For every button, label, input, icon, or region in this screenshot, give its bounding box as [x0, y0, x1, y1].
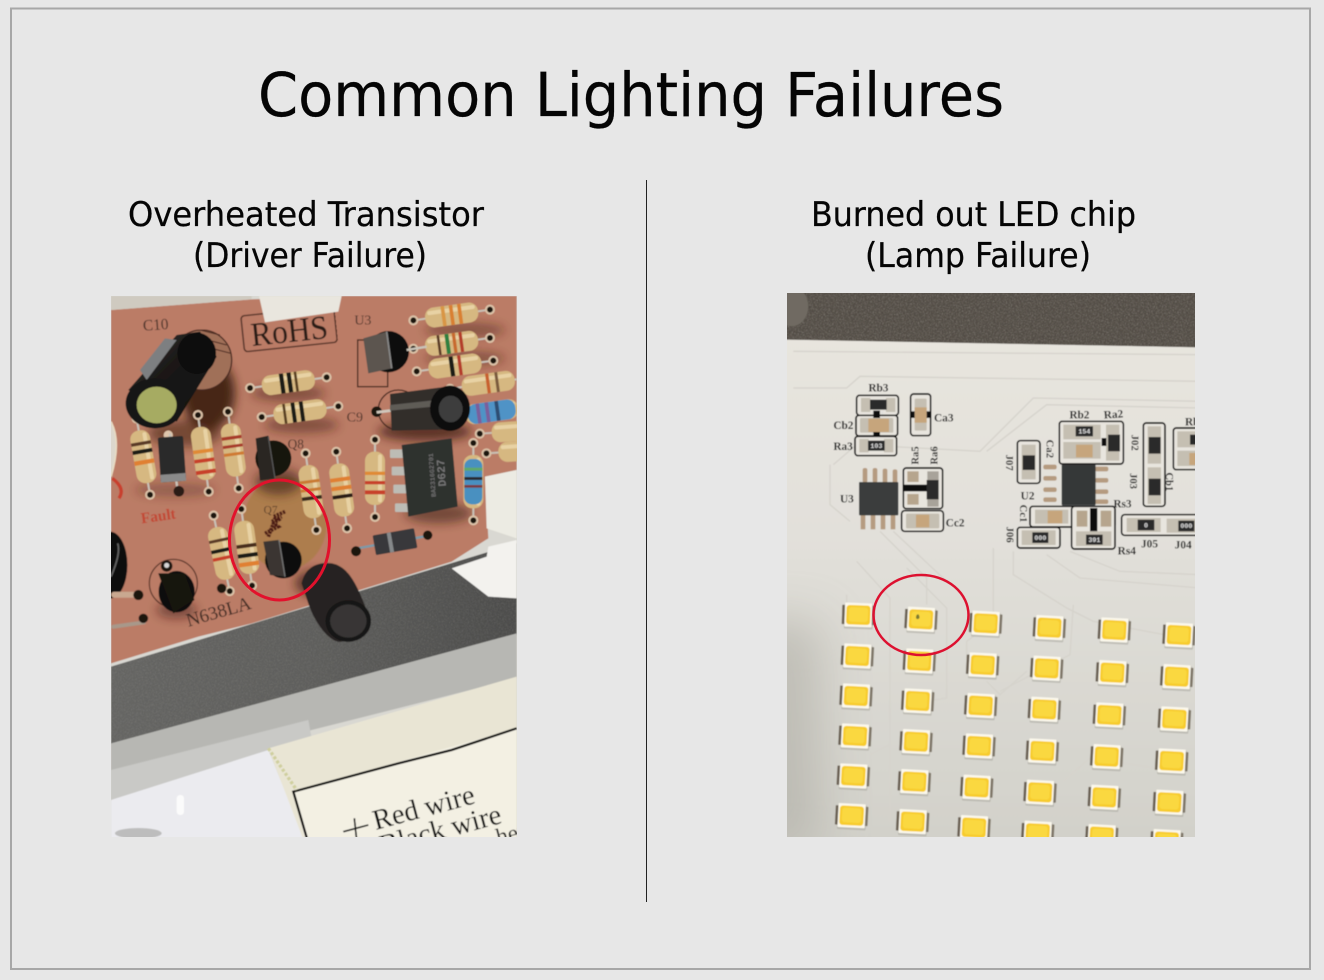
U3 driver circuit group — [833, 382, 965, 531]
SMD Rb3: 154 — [872, 410, 884, 418]
U2 silkscreen labels: J03 — [1127, 473, 1138, 489]
U2 driver circuit group — [1003, 408, 1202, 558]
shadows — [135, 323, 505, 618]
resistors — [408, 302, 496, 328]
U2 silkscreen labels: Cb1 — [1163, 472, 1174, 491]
SMD Cc1, Rs3, Rs4: 391 — [1088, 536, 1100, 544]
silkscreen labels: Q8 — [288, 437, 304, 452]
U2 silkscreen labels: Ca2 — [1044, 440, 1055, 458]
red circle highlight — [874, 575, 968, 655]
op-amp IC: D627 — [436, 459, 450, 487]
U3 silkscreen labels: Cc2 — [946, 518, 965, 530]
U3 silkscreen labels: Ra3 — [833, 441, 853, 453]
left column heading: (Driver Failure) — [193, 236, 427, 276]
U3 silkscreen labels: Ca3 — [934, 412, 954, 424]
silkscreen labels: N638LA — [184, 593, 254, 631]
capacitor C10 — [126, 330, 232, 428]
U2 silkscreen labels — [1003, 408, 1199, 558]
light grey housing band — [111, 633, 517, 770]
op-amp IC: BA2316G2701 — [427, 453, 438, 497]
SMD Rb2 and Ra2 — [1059, 421, 1123, 464]
warning label: Red wire — [369, 779, 478, 837]
SMD Cc2 — [902, 511, 943, 531]
U3 silkscreen labels: Cb2 — [833, 420, 854, 432]
warning label: Black wire — [376, 799, 505, 862]
U2 silkscreen labels: Rb2 — [1069, 410, 1090, 422]
PCB — [111, 296, 517, 663]
scorched area around transistor — [243, 477, 327, 570]
white connectors — [485, 470, 517, 538]
U2 silkscreen labels: J07 — [1003, 455, 1014, 471]
diodes — [157, 429, 187, 498]
right column heading — [811, 195, 1136, 276]
transistor lower left — [149, 559, 226, 613]
U3 silkscreen labels: Ra5 — [910, 446, 921, 465]
SMD J05 and J04: 000 — [1180, 522, 1192, 530]
SMD Cb2 — [856, 411, 898, 439]
transistor U3 — [358, 331, 427, 387]
tall black inductor — [302, 563, 371, 642]
metal strip — [111, 543, 517, 745]
right column heading: (Lamp Failure) — [865, 236, 1091, 276]
photo: burned out LED chip on lamp board — [787, 293, 1195, 837]
column divider — [646, 180, 648, 902]
op-amp IC — [390, 438, 458, 517]
U2 silkscreen labels: J04 — [1175, 540, 1192, 552]
SMD Ra5 and Ra6 — [903, 468, 943, 509]
U3 silkscreen labels — [833, 382, 965, 530]
U2 silkscreen labels: U2 — [1021, 490, 1035, 502]
U2 silkscreen labels: J02 — [1129, 435, 1140, 451]
SMD Rb3 — [857, 395, 898, 418]
SMD J02 and J03 — [1143, 423, 1165, 506]
left column heading — [128, 195, 484, 276]
SMD Ra3 — [855, 436, 897, 456]
right column heading: Burned out LED chip — [811, 195, 1136, 235]
SMD Cc1, Rs3, Rs4 — [1030, 506, 1115, 549]
silkscreen labels: U3 — [354, 314, 371, 329]
burned out LED — [904, 606, 938, 634]
title: Common Lighting Failures — [258, 60, 1004, 131]
U2 silkscreen labels: Rs4 — [1118, 546, 1136, 558]
U3 silkscreen labels: Ra6 — [930, 446, 941, 465]
SMD J05 and J04: 0 — [1144, 521, 1148, 529]
U2 silkscreen labels: J05 — [1141, 538, 1158, 550]
capacitor at left edge — [93, 532, 148, 629]
SMD J06 — [1017, 527, 1060, 548]
silkscreen labels — [112, 306, 371, 631]
U2 silkscreen labels: Cc1 — [1017, 505, 1028, 522]
faint copper traces — [793, 351, 1200, 821]
warning label — [267, 676, 517, 837]
left edge notch — [111, 422, 116, 477]
U2 silkscreen labels: Ra2 — [1103, 408, 1124, 422]
silkscreen labels: RoHS — [249, 309, 330, 354]
SMD J05 and J04 — [1122, 515, 1202, 535]
LED array — [835, 602, 1196, 856]
left column heading: Overheated Transistor — [128, 195, 484, 235]
SMD J07 — [1017, 441, 1040, 483]
SMD Ra3: 103 — [870, 442, 882, 450]
U3 silkscreen labels: U3 — [840, 494, 854, 506]
SMD J06: 000 — [1034, 534, 1046, 542]
chip U3 — [859, 468, 898, 529]
SMD right edge — [1173, 428, 1200, 470]
burnt transistor Q7 — [263, 512, 302, 578]
U2 silkscreen labels: J06 — [1004, 527, 1015, 543]
warning label: her — [493, 818, 529, 851]
U2 silkscreen labels: Rs3 — [1113, 498, 1132, 510]
SMD Ca3 — [911, 394, 931, 436]
photo: overheated transistor on driver board — [111, 296, 517, 837]
white block at top — [259, 296, 342, 322]
silkscreen labels: C10 — [142, 316, 169, 335]
U3 silkscreen labels: Rb3 — [868, 382, 889, 394]
transistor Q8 — [255, 436, 291, 481]
silkscreen labels: Q7 — [264, 504, 278, 516]
silkscreen labels: Fault — [140, 505, 178, 527]
capacitor C9 — [371, 386, 470, 431]
red circle highlight — [230, 480, 330, 600]
white housing — [111, 750, 302, 837]
chip U2 — [1043, 465, 1108, 505]
U2 silkscreen labels: Rb — [1185, 416, 1199, 428]
silkscreen labels: C9 — [347, 410, 363, 425]
SMD Rb2 and Ra2: 154 — [1078, 428, 1090, 436]
